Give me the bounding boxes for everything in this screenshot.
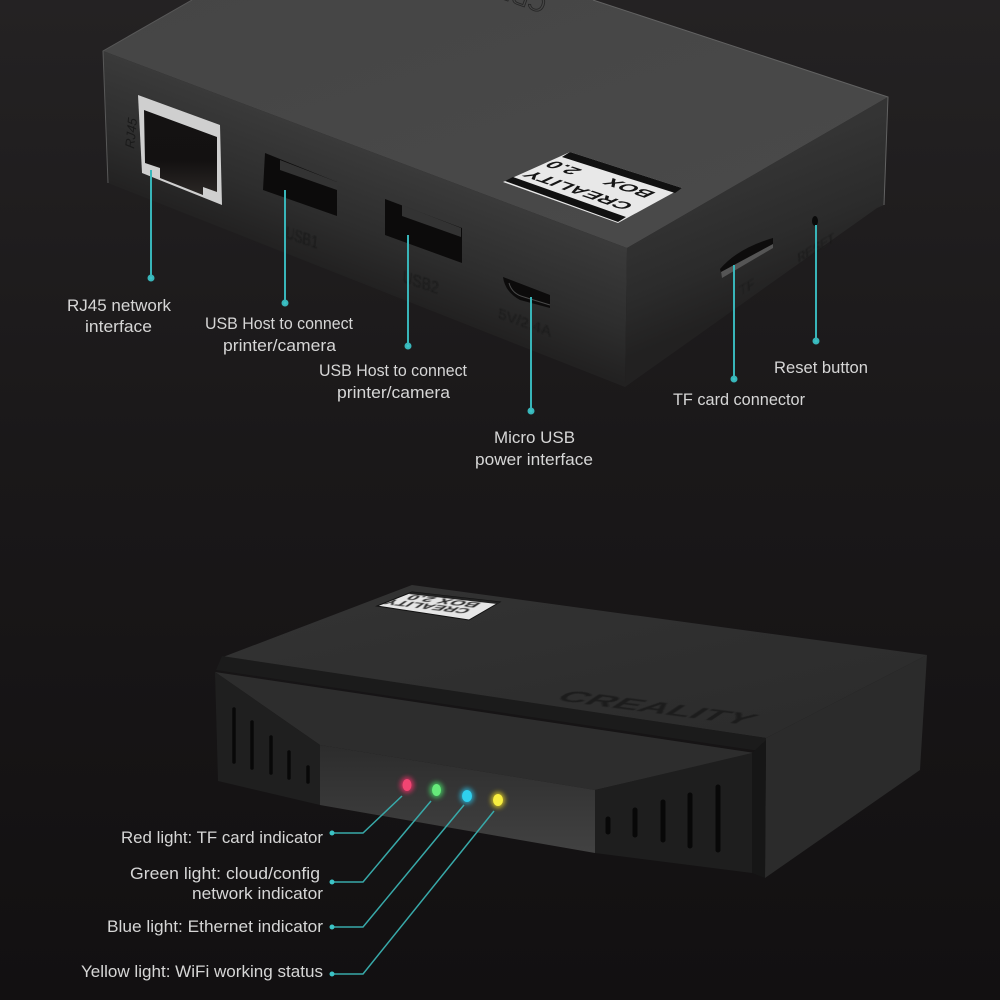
text: TF: TF card connector xyxy=(673,390,805,409)
text: USB1: USB Host to connect xyxy=(205,314,353,333)
leader: reset xyxy=(814,225,818,344)
label: small sticker: BOX 2.0 xyxy=(403,593,484,609)
text: USB1: printer/camera xyxy=(223,336,337,355)
text: green xyxy=(130,864,323,903)
USB2 port xyxy=(385,199,462,263)
leader: green xyxy=(330,801,431,884)
front centre panel xyxy=(320,745,595,853)
text: RJ45: RJ45 network xyxy=(67,296,171,315)
yellow light xyxy=(491,792,505,808)
text: micro USB: Micro USB xyxy=(494,428,575,447)
USB1 print: USB1 xyxy=(285,223,319,253)
labels: top device xyxy=(67,296,868,469)
label: small sticker: CREALITY xyxy=(380,597,474,615)
label: Creality Box 2.0 xyxy=(503,152,682,223)
leader: RJ45 xyxy=(148,170,154,280)
micro USB port xyxy=(503,277,550,308)
RJ45 port xyxy=(138,95,222,205)
text: blue: Blue light: Ethernet indicator xyxy=(107,917,323,936)
text: green: network indicator xyxy=(192,884,323,903)
left vent panel xyxy=(215,672,320,805)
top face xyxy=(103,0,888,248)
logo on top face: CREALITY xyxy=(549,687,765,728)
USB2 print: USB2 xyxy=(402,267,440,298)
text: RJ45 xyxy=(67,296,171,336)
top face xyxy=(223,585,927,738)
RESET print: RESET xyxy=(797,229,835,266)
right vents xyxy=(608,787,718,850)
USB1 port xyxy=(263,153,337,216)
text: reset: Reset button xyxy=(774,358,868,377)
device: front view with lights xyxy=(215,585,927,878)
leader: USB2 xyxy=(406,235,410,348)
leader: red xyxy=(330,796,402,836)
leader: blue xyxy=(330,805,464,930)
green light xyxy=(430,782,444,798)
left vents xyxy=(234,709,308,782)
reset hole xyxy=(812,216,818,226)
leader: micro USB xyxy=(528,297,534,414)
TF card slot xyxy=(720,238,773,278)
text: USB1 xyxy=(205,314,353,355)
front ridge xyxy=(216,656,766,752)
text: USB2: USB Host to connect xyxy=(319,361,467,380)
text: green: Green light: cloud/config xyxy=(130,864,320,883)
power print: 5V/2.4A xyxy=(498,305,552,341)
right vent panel xyxy=(595,753,752,873)
label: small sticker xyxy=(377,592,500,620)
text: micro USB: power interface xyxy=(475,450,593,469)
left face with ports xyxy=(103,51,627,387)
right side xyxy=(765,655,927,878)
leader lines: top device xyxy=(148,170,818,414)
red light xyxy=(400,777,414,793)
leader: yellow xyxy=(330,811,494,976)
label: Creality Box 2.0: 2.0 xyxy=(540,159,587,177)
right face xyxy=(625,97,888,387)
text: RJ45: interface xyxy=(85,317,152,336)
corner strip xyxy=(752,740,766,878)
front upper panel xyxy=(215,672,755,790)
leader lines: front device xyxy=(330,796,494,976)
text: micro USB xyxy=(475,428,593,469)
device: top view with ports xyxy=(103,0,888,387)
label: Creality Box 2.0: BOX xyxy=(598,176,661,200)
text: USB2 xyxy=(319,361,467,402)
leader: TF xyxy=(732,265,736,382)
indicator lights xyxy=(400,777,505,808)
text: red: Red light: TF card indicator xyxy=(121,828,323,847)
blue light xyxy=(460,788,474,804)
TF print: TF xyxy=(739,274,755,299)
right edge highlight xyxy=(593,0,888,205)
text: yellow: Yellow light: WiFi working status xyxy=(81,962,323,981)
left edge highlight xyxy=(103,0,192,183)
text: USB2: printer/camera xyxy=(337,383,451,402)
RJ45 print: RJ45 xyxy=(122,116,140,150)
leader: USB1 xyxy=(282,190,288,306)
labels: front device xyxy=(81,828,323,981)
label: Creality Box 2.0: CREALITY xyxy=(518,169,639,212)
